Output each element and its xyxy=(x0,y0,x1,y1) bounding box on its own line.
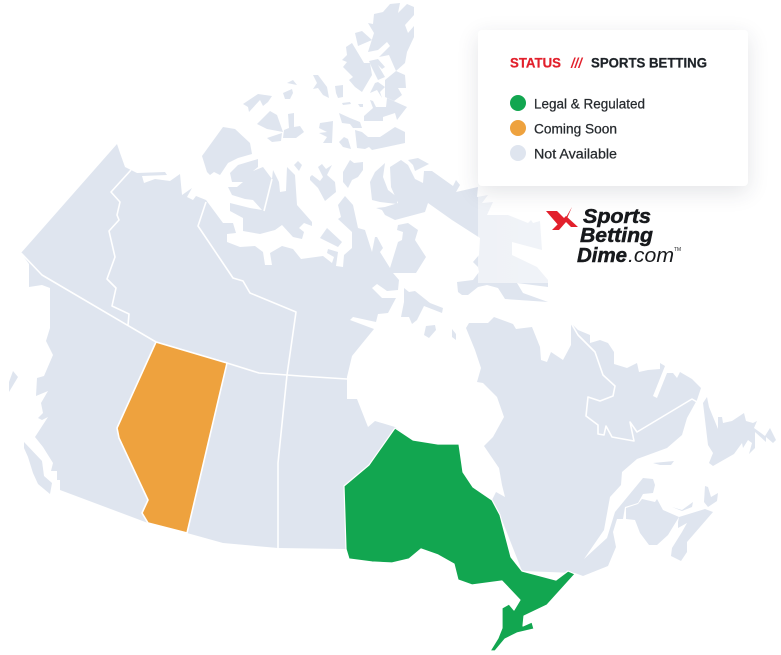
islands: Baffin xyxy=(376,160,548,302)
legend panel xyxy=(478,30,748,186)
logo: Sports Betting Dime xyxy=(546,206,681,267)
islands: high Arctic xyxy=(202,127,252,175)
islands: Atlantic xyxy=(626,499,679,545)
logo icon xyxy=(546,207,578,230)
legend item: not available: Not Available xyxy=(534,146,617,162)
region: Alberta, coming soon xyxy=(117,342,227,533)
logo wordmark: Dime xyxy=(577,245,627,267)
islands: west coast xyxy=(24,442,52,494)
legend heading: SPORTS BETTING xyxy=(591,56,707,70)
logo wordmark: Sports xyxy=(583,206,651,228)
legend heading: /// xyxy=(570,56,583,70)
islands: Hudson Bay xyxy=(401,288,443,324)
legend item: legal and regulated: Legal & Regulated xyxy=(534,96,645,112)
region: Ontario, legal and regulated xyxy=(344,428,575,651)
legend heading: STATUS xyxy=(510,56,561,70)
provincial borders xyxy=(21,170,697,548)
logo wordmark: TM xyxy=(674,247,681,253)
logo wordmark: .com xyxy=(628,245,674,267)
legend heading xyxy=(510,56,707,70)
logo wordmark xyxy=(577,206,681,267)
legend item: coming soon xyxy=(510,120,617,136)
legend item: not available xyxy=(510,145,617,162)
translucent backdrop under legend xyxy=(478,186,748,283)
legend item: coming soon: Coming Soon xyxy=(534,122,617,136)
logo wordmark: Betting xyxy=(580,225,653,247)
